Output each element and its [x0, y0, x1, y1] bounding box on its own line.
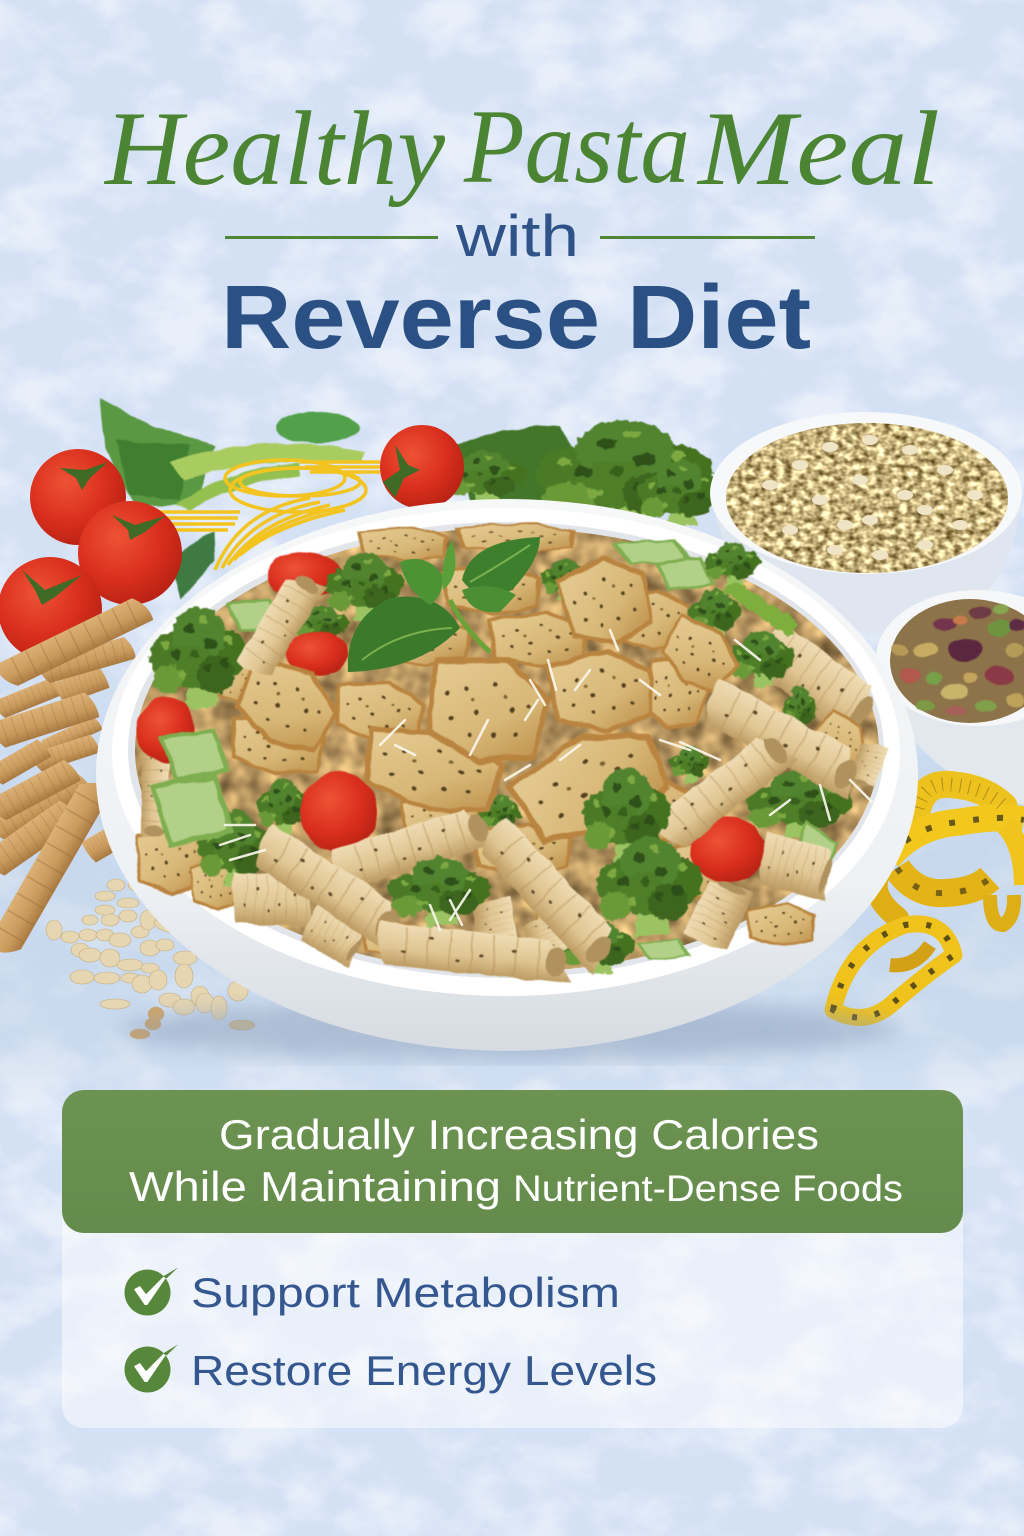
dry wholegrain penne stack — [0, 594, 154, 961]
heading: Reverse Diet: Reverse Diet — [221, 268, 811, 368]
benefit: Restore Energy Levels: Restore Energy Levels — [191, 1347, 657, 1394]
benefit: Support Metabolism: Support Metabolism — [191, 1269, 620, 1316]
food base in bowl — [135, 528, 879, 972]
cucumber chunks — [150, 729, 846, 961]
panel: white benefits card — [62, 1090, 963, 1428]
icon: check badge — [124, 1344, 178, 1392]
title: Healthy Pasta Meal: Pasta — [463, 88, 690, 205]
large broccoli over pasta — [388, 768, 703, 937]
title: Healthy Pasta Meal: Meal — [696, 90, 940, 207]
food surroundings: greens and zucchini — [100, 398, 600, 600]
back-layer pasta, chicken and vegetables — [135, 522, 888, 958]
grated parmesan — [220, 630, 872, 930]
tomatoes around the bowl — [0, 425, 464, 661]
banner: green callout: Nutrient-Dense Foods — [513, 1168, 903, 1209]
banner: green callout — [62, 1090, 963, 1233]
main pasta bowl — [96, 499, 918, 1060]
grilled chicken slices — [221, 548, 749, 865]
broccoli behind the bowl — [443, 420, 721, 533]
food surroundings: yellow squash noodles — [155, 460, 380, 570]
subtitle: with, flanked by rules — [225, 204, 815, 269]
broccoli florets — [150, 542, 853, 974]
grain bowl — [710, 412, 1022, 633]
title: Healthy Pasta Meal: Healthy — [103, 90, 446, 207]
scattered pale seeds — [46, 879, 255, 1039]
tomato pieces — [137, 588, 766, 883]
banner: green callout: Gradually Increasing Calories — [219, 1111, 819, 1158]
measuring tape — [833, 784, 1024, 1018]
basil leaves — [348, 537, 540, 672]
penne pieces — [230, 566, 870, 984]
bean bowl — [876, 590, 1024, 805]
title: Healthy Pasta Meal — [103, 88, 940, 207]
subtitle: with, flanked by rules: with — [455, 204, 579, 269]
banner: green callout: While Maintaining — [129, 1163, 501, 1210]
icon: check badge — [124, 1268, 178, 1316]
